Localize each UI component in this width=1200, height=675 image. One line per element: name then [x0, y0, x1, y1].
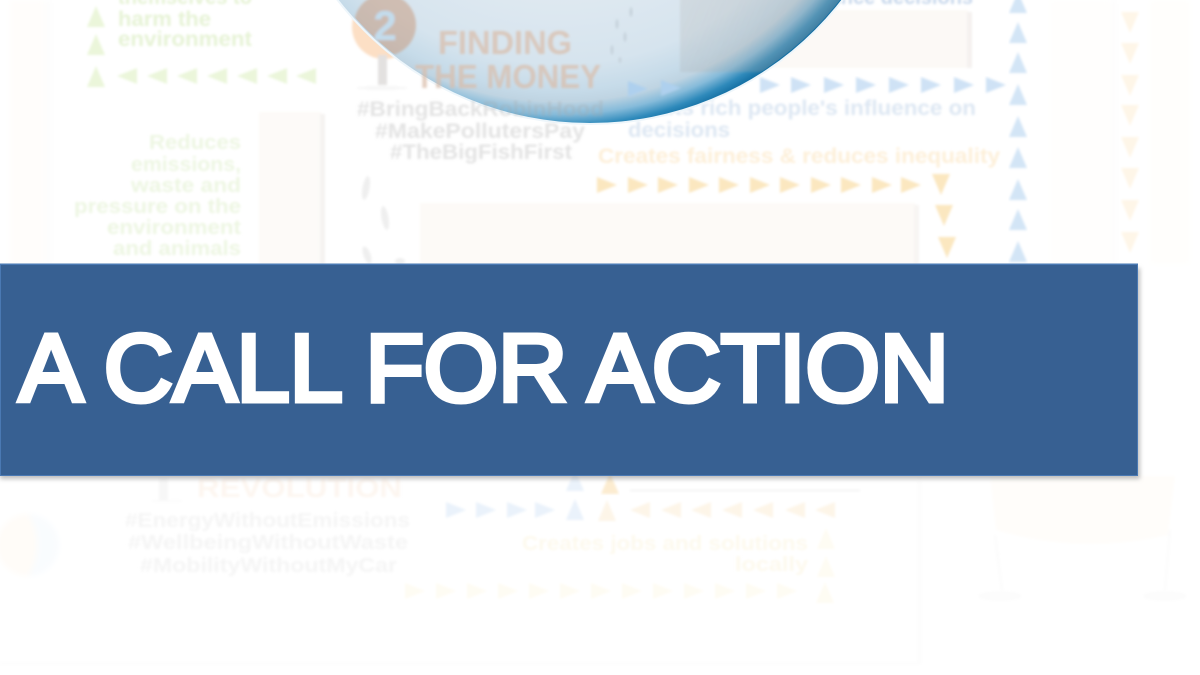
green text: reduces emissions: Reduces [149, 132, 241, 154]
marker circle through sphere [354, 0, 416, 56]
heading: revolution: REVOLUTION [197, 473, 402, 503]
hashtags: finding the money: #TheBigFishFirst [390, 141, 572, 164]
flag sign bottom right [978, 476, 1187, 601]
pale box left [259, 112, 325, 264]
left side band [10, 0, 51, 264]
sphere [336, 0, 844, 125]
hashtags: revolution: #EnergyWithoutEmissions [125, 510, 410, 532]
heading: finding the money: THE MONEY [415, 58, 601, 95]
lower blue arrows [446, 470, 584, 520]
hashtags: revolution: #MobilityWithoutMyCar [140, 555, 397, 577]
green arrows [87, 6, 316, 87]
title: A CALL FOR ACTION [19, 315, 949, 422]
heading: finding the money: FINDING [438, 24, 572, 61]
blue text: limits influence [628, 97, 976, 142]
hashtags: finding the money [357, 98, 604, 164]
box seen through sphere [680, 0, 840, 73]
faded background infographic [75, 0, 1138, 602]
green text: reduces emissions: environment [107, 217, 241, 239]
blue text: limits influence: Limits rich people's influence on [628, 97, 976, 120]
green text: reduces emissions [74, 132, 241, 260]
green text: reduces emissions: pressure on the [74, 196, 241, 218]
banner shadow [0, 268, 1140, 479]
footprints [360, 176, 405, 265]
green text: harm the environment [118, 0, 252, 51]
blue right arrows [628, 77, 1006, 97]
heading: finding the money [415, 24, 601, 95]
right side panels [1050, 0, 1190, 264]
faint orange arrow under banner [601, 473, 619, 494]
green text: harm the environment: harm the [118, 8, 211, 31]
pale box top right [680, 10, 972, 68]
blue up arrows [1009, 0, 1027, 262]
orange arrows [597, 174, 956, 258]
lower text: creates jobs: locally [735, 554, 809, 576]
balloon marker 2 [352, 0, 416, 90]
lower text: creates jobs: Creates jobs and solutions [522, 533, 808, 555]
blue text: limits influence: decisions [628, 119, 730, 142]
green text: reduces emissions: waste and [130, 175, 241, 197]
faint line under banner [630, 489, 860, 492]
lower text: creates jobs [522, 533, 809, 576]
green text: reduces emissions: emissions, [131, 154, 241, 176]
green text: harm the environment: environment [118, 28, 252, 51]
lower panel frame [0, 478, 922, 665]
hashtags: revolution: #WellbeingWithoutWaste [128, 532, 408, 554]
lower right yellow arrows [405, 528, 835, 603]
far right orange arrows [1121, 12, 1139, 253]
footprints seen through sphere [610, 7, 632, 63]
globe icon [0, 514, 59, 576]
banner [0, 264, 1138, 476]
lower orange arrows [598, 500, 835, 521]
marker stem [152, 478, 182, 502]
marker circle through sphere: 2 [373, 2, 397, 49]
pale box middle [420, 203, 919, 264]
hashtags: finding the money: #MakePollutersPay [375, 120, 585, 143]
orange text: creates fairness: Creates fairness & reduces inequality [598, 145, 1000, 168]
hashtags: finding the money: #BringBackRobinHood [357, 98, 604, 121]
hashtags: revolution [125, 510, 410, 577]
green text: reduces emissions: and animals [113, 238, 241, 260]
